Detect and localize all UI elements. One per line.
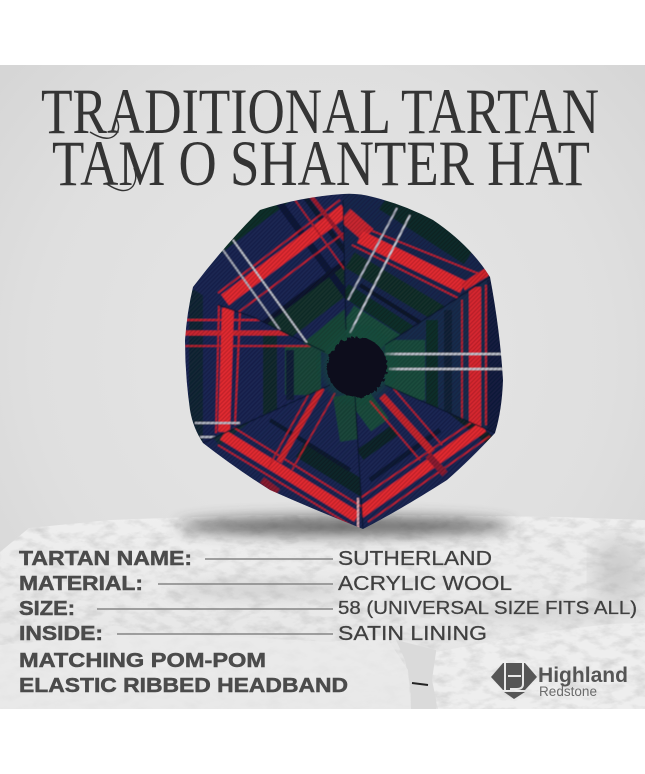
spec values: ACRYLIC WOOL [338, 573, 512, 595]
spec labels [19, 548, 348, 697]
hat seams [203, 200, 495, 529]
tartan tam hat [185, 194, 503, 529]
hat panel: left [185, 289, 330, 441]
hat panel: right [384, 280, 503, 432]
hat panel: top right [343, 194, 490, 348]
connector lines [97, 559, 333, 634]
white stone podium [0, 515, 645, 709]
spec labels: MATERIAL: [19, 573, 143, 595]
pom-pom [327, 337, 387, 397]
spec labels: INSIDE: [19, 623, 103, 645]
hat panel: bottom right [356, 386, 494, 528]
hat crown green [321, 324, 398, 404]
hat panel: top left [193, 194, 347, 354]
spec labels: ELASTIC RIBBED HEADBAND [19, 675, 348, 697]
spec values [338, 548, 637, 645]
title [41, 76, 599, 200]
spec labels: TARTAN NAME: [19, 548, 192, 570]
spec values: 58 (UNIVERSAL SIZE FITS ALL) [338, 598, 637, 618]
spec labels: SIZE: [19, 598, 75, 620]
logo wordmark: Highland [538, 664, 628, 687]
spec values: SATIN LINING [338, 623, 487, 645]
hat base cloth [192, 196, 470, 442]
hat shadow on podium [177, 516, 513, 536]
logo sub-wordmark: Redstone [539, 684, 597, 699]
spec labels: MATCHING POM-POM [19, 650, 266, 672]
logo icon: diamond monogram [491, 663, 537, 699]
hat panel: bottom left [204, 386, 362, 528]
spec values: SUTHERLAND [338, 548, 492, 570]
logo: Highland Redstone [491, 663, 628, 699]
